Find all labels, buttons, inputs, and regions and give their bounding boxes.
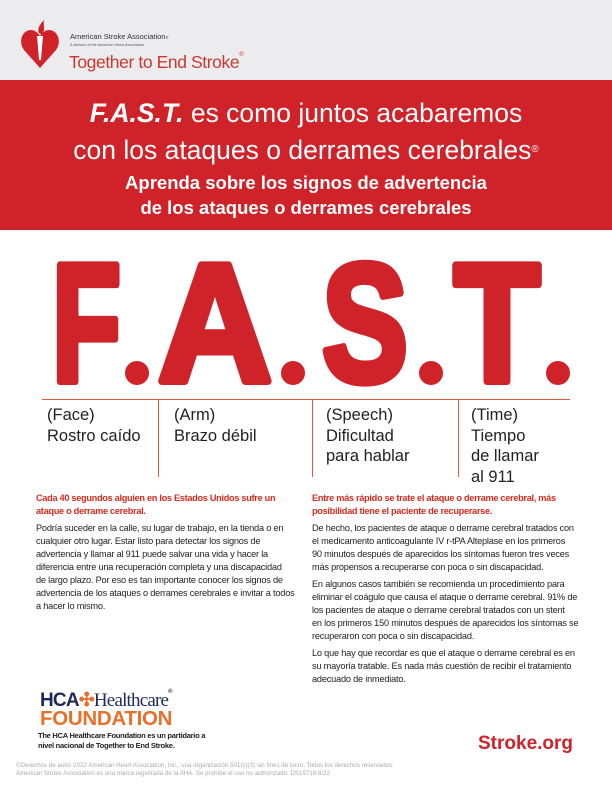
- left text block: advertencia y llamar al 911 puede salvar una vida y hacer la: [36, 549, 268, 559]
- footer: [16, 762, 394, 777]
- right text block: Lo que hay que recordar es que el ataque o derrame cerebral es en: [312, 648, 575, 658]
- title band: [0, 80, 612, 230]
- logo: heart torch: [21, 20, 59, 68]
- column: time: [471, 406, 539, 486]
- Stroke.org: Stroke.org: [478, 733, 573, 754]
- big FAST letters: [52, 240, 570, 390]
- right text block: su mayoría tratable. Es nada más cuestión de recibir el tratamiento: [312, 661, 571, 671]
- HCA logo: FOUNDATION: [40, 707, 172, 730]
- right text block: De hecho, los pacientes de ataque o derrame cerebral tratados con: [312, 523, 574, 533]
- right text block: En algunos casos también se recomienda un procedimiento para: [312, 579, 565, 589]
- header bar: Together to End Stroke®: [69, 52, 243, 72]
- column: speech: [326, 406, 410, 465]
- left text block: a hacer lo mismo.: [36, 601, 105, 611]
- column: time: Tiempo: [471, 426, 525, 444]
- right text block: el medicamento anticoagulante IV r-tPA Alteplase en los primeros: [312, 536, 565, 546]
- column: face: (Face): [47, 406, 95, 424]
- right text block: posibilidad tiene el paciente de recuperarse.: [312, 506, 492, 516]
- left text block: ataque o derrame cerebral.: [36, 506, 146, 516]
- title: F.A.S.T. es como juntos acabaremos: [90, 98, 522, 128]
- title band: con los ataques o derrames cerebrales®: [73, 135, 539, 165]
- right text block: en los primeros 150 minutos después de aparecidos los síntomas se: [312, 618, 578, 628]
- left text block: Podría suceder en la calle, su lugar de trabajo, en la tienda o en: [36, 523, 283, 533]
- column: arm: (Arm): [174, 406, 215, 424]
- column: face: Rostro caído: [47, 426, 141, 444]
- logo text: American Stroke Association®: [70, 32, 168, 41]
- column: time: de llamar: [471, 447, 539, 465]
- right text block: los pacientes de ataque o derrame cerebral tratados con un stent: [312, 605, 565, 615]
- left text block: [36, 493, 294, 611]
- left text block: cualquier otro lugar. Estar listo para detectar los signos de: [36, 536, 260, 546]
- HCA logo: [40, 688, 172, 730]
- HCA tagline: The HCA Healthcare Foundation es un partidario a: [38, 731, 205, 740]
- footer: American Stroke Association es una marca registrada de la AHA. Se prohíbe el uso no authorizado. DS19718 8/22: [16, 770, 330, 777]
- right text block: Entre más rápido se trate el ataque o derrame cerebral, más: [312, 493, 556, 503]
- subtitle: Aprenda sobre los signos de advertencia: [125, 172, 487, 193]
- left text block: Cada 40 segundos alguien en los Estados Unidos sufre un: [36, 493, 275, 503]
- left text block: de largo plazo. Por eso es tan importante conocer los signos de: [36, 575, 283, 585]
- column: speech: (Speech): [326, 406, 393, 424]
- right text block: adecuado de inmediato.: [312, 674, 406, 684]
- right text block: [312, 493, 578, 684]
- right text block: eliminar el coágulo que causa el ataque o derrame cerebral. 91% de: [312, 592, 577, 602]
- HCA logo: HCA✣Healthcare®: [40, 689, 172, 711]
- column: arm: [174, 406, 257, 444]
- right text block: recuperaron con poca o sin discapacidad.: [312, 631, 474, 641]
- left text block: diferencia entre una recuperación completa y una discapacidad: [36, 562, 282, 572]
- column: arm: Brazo débil: [174, 426, 257, 444]
- right text block: más propensos a recuperarse con poca o sin discapacidad.: [312, 562, 543, 572]
- column: time: al 911: [471, 468, 515, 486]
- HCA tagline: nivel nacional de Together to End Stroke.: [38, 741, 175, 750]
- footer: ©Derechos de autor 2022 American Heart Association, Inc., una organización 501(c)(3) sin fines de lucro. Todos los derechos reservados.: [16, 762, 394, 769]
- right text block: 90 minutos después de aparecidos los síntomas fueron tres veces: [312, 549, 569, 559]
- title band: de los ataques o derrames cerebrales: [140, 197, 472, 218]
- column: face: [47, 406, 141, 444]
- left text block: advertencia de los ataques o derrames cerebrales e invitar a todos: [36, 588, 294, 598]
- header bar: [0, 0, 612, 80]
- column: speech: para hablar: [326, 447, 409, 465]
- header bar: A division of the American Heart Association.: [70, 43, 145, 47]
- column: time: (Time): [471, 406, 518, 424]
- divider line: [42, 399, 570, 400]
- HCA tagline: [38, 731, 206, 750]
- column: speech: Dificultad: [326, 426, 394, 444]
